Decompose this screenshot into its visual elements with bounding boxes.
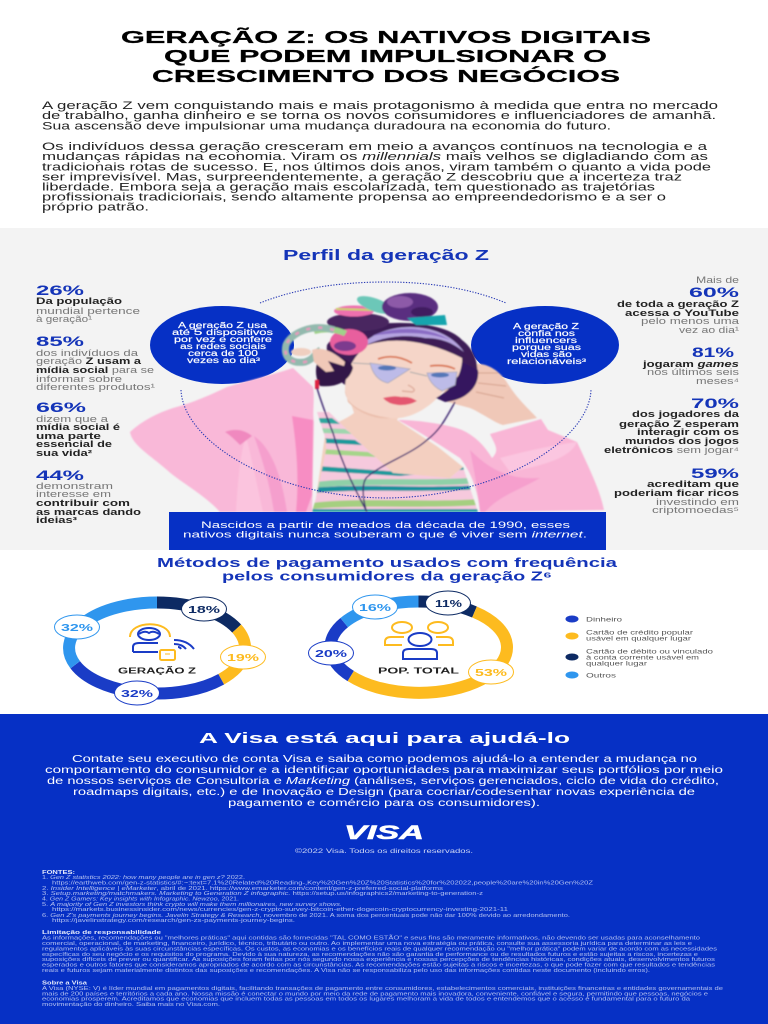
left statistics: 85% — [36, 333, 85, 349]
callout bubble: dispositivos: cerca de 100 — [188, 349, 259, 358]
donut chart: população total — [308, 591, 514, 693]
right statistics: 59% — [691, 465, 740, 481]
label 20%: 20% — [315, 649, 347, 660]
left statistics: mídia social para se — [36, 365, 154, 375]
chart label: POP. TOTAL — [378, 666, 459, 676]
banner: nascidos: Nascidos a partir de meados da década de 1990, esses — [201, 520, 570, 531]
legend: à conta corrente usável em — [586, 654, 699, 662]
intro paragraph 1: A geração Z vem conquistando mais e mais protagonismo à medida que entra no mercado — [42, 100, 718, 112]
left jacket sleeve and body — [130, 368, 314, 512]
right statistics: dos jogadores da — [632, 409, 740, 419]
callout bubble: dispositivos: A geração Z usa — [178, 321, 268, 330]
about visa: economias prosperem. Acreditamos que economias que incluem todas as pessoas em todos os lugares melhoram a vida de todos e entendemos que o acesso é fundamental para o futuro da — [42, 996, 690, 1002]
disclaimer: regulamentos aplicáveis às suas circunstâncias específicas. Os custos, as economias e os benefícios reais de qualquer recomendação ou "melhor prática" podem variar de acordo com as necessidades — [42, 946, 718, 952]
lilac hair — [358, 327, 464, 352]
left statistics: 66% — [36, 399, 87, 415]
sources: 4. Gen Z Gamers: Key insights with Infographic. Newzoo, 2021. — [42, 896, 239, 902]
pink bun — [330, 329, 368, 355]
label 32% light blue: 32% — [61, 623, 93, 634]
right jacket sleeve and body — [398, 419, 604, 512]
right statistics: jogaram games — [642, 359, 739, 369]
title: QUE PODEM IMPULSIONAR O — [164, 46, 607, 66]
disclaimer: esperados e outros fatores que consideramos apropriados de acordo com as circunstâncias. As recomendações estão sujeitas a riscos e incertezas, o que pode fazer com que resultados e tendências — [42, 962, 716, 968]
label 19% — [220, 645, 266, 669]
callout bubble: dispositivos: até 5 dispositivos — [172, 327, 273, 338]
visa paragraph: Contate seu executivo de conta Visa e saiba como podemos ajudá-lo a entender a mudança no — [72, 754, 698, 765]
label 18% — [182, 597, 226, 621]
callout bubble: influencers — [471, 306, 619, 384]
left statistics: sua vida² — [36, 448, 92, 458]
disclaimer: comercial, operacional, de marketing, financeiro, jurídico, técnico, tributário ou outro. Ao implementar uma nova estratégia ou prática, consulte sua assessoria jurídica para determinar as leis e — [42, 941, 692, 947]
heading: métodos de pagamento: pelos consumidores da geração Z⁶ — [222, 568, 552, 584]
right statistics — [604, 275, 740, 515]
right statistics: 81% — [692, 344, 735, 360]
left statistics: interesse em — [36, 489, 111, 499]
right statistics: Mais de — [696, 275, 739, 285]
visa paragraph: de nossos serviços de Consultoria e Marketing (análises, serviços gerenciados, ciclo de vida do crédito, — [47, 776, 719, 787]
banner: nascidos: nativos digitais nunca souberam o que é viver sem internet . — [183, 530, 587, 540]
left statistics: à geração¹ — [36, 314, 92, 324]
legend: Cartão de crédito popular — [586, 630, 694, 636]
label 20% — [308, 641, 354, 665]
right statistics: investindo em — [656, 497, 739, 507]
right ear cup — [436, 362, 478, 402]
lips — [383, 396, 417, 405]
disclaimer: suposições difíceis de prever ou quantificar. As suposições foram feitas por nós segundo nossa experiência e nossas percepções de tendências históricas, condições atuais, desenvolvimentos futuros — [42, 957, 716, 963]
intro paragraph 2: liberdade. Embora seja a geração mais escolarizada, tem questionado as trajetórias — [42, 182, 655, 194]
intro paragraph 2: próprio patrão. — [42, 202, 149, 214]
label 53% — [468, 660, 514, 684]
left statistics: as marcas dando — [36, 507, 142, 517]
visa paragraph: comportamento do consumidor e a identificar oportunidades para maximizar seus portfólios por meio — [45, 765, 724, 776]
callout bubble: influencers: vidas são — [521, 350, 573, 359]
left hand — [312, 349, 345, 372]
donut chart: geração Z — [54, 597, 266, 705]
callout bubble: influencers: A geração Z — [513, 322, 579, 331]
legend: Outros — [586, 672, 616, 680]
sources: 6. Gen Z's payments journey begins. Javelin Strategy & Research, novembro de 2021. A soma dos percentuais pode não dar 100% devido ao arredondamento. — [42, 913, 570, 919]
intro paragraph 2: tradicionais rotas de sucesso. E, nos últimos dois anos, viram também o quanto a vida pode — [42, 162, 711, 174]
callout bubble: dispositivos: por vez e confere — [174, 335, 272, 344]
icon: group of people — [385, 622, 453, 659]
label 32% light blue — [54, 615, 100, 639]
sources: FONTES: — [42, 870, 75, 876]
disclaimer: específicas do seu negócio e os requisitos do programa. Devido à sua natureza, as recomendações não são garantia de performance ou de resultados futuros e estão sujeitas a riscos, incertezas e — [42, 952, 698, 958]
right statistics: vez ao dia¹ — [679, 325, 739, 335]
intro paragraph 1 — [42, 100, 718, 132]
right statistics: geração Z esperam — [619, 419, 739, 429]
left statistics: geração Z usam a — [36, 356, 142, 366]
heading: métodos de pagamento: Métodos de pagamento usados com frequência — [157, 555, 618, 570]
right statistics: pelo menos uma — [641, 316, 739, 326]
right statistics: de toda a geração Z — [617, 299, 740, 309]
sources: 5. A majority of Gen Z investors think crypto will make them millionaires, new survey shows. — [42, 902, 342, 908]
intro paragraph 2 — [42, 141, 711, 214]
right statistics: criptomoedas⁵ — [652, 505, 739, 515]
right statistics: meses⁴ — [696, 376, 739, 386]
neck and chest — [316, 388, 463, 500]
left statistics: dizem que a — [36, 414, 108, 424]
sources: 2. Insider Intelligence | eMarketer , abril de 2021. https://www.emarketer.com/content/gen-z-preferred-social-platforms — [42, 886, 444, 892]
callout bubble: dispositivos — [150, 306, 294, 384]
visa heading: A Visa está aqui para ajudá-lo — [199, 731, 570, 747]
legend: usável em qualquer lugar — [586, 636, 692, 642]
right statistics: nos últimos seis — [647, 367, 740, 377]
title: CRESCIMENTO DOS NEGÓCIOS — [152, 65, 620, 86]
sources: 1. Gen Z statistics 2022: how many people are in gen z? 2022. — [42, 875, 245, 881]
visa paragraph — [45, 754, 724, 809]
label 32% blue: 32% — [121, 689, 153, 700]
sources: 3. Setup.marketing/matchmakers. Marketing to Generation Z infographic. https://setup.us/infographics2/marketing-to-generation-z — [42, 891, 484, 897]
intro paragraph 1: Sua ascensão deve impulsionar uma mudança duradoura na economia do futuro. — [42, 120, 611, 132]
intro paragraph 2: ser imprevisível. Mas, surpreendentemente, a geração Z descobriu que a incerteza traz — [42, 172, 682, 184]
visa paragraph: pagamento e comércio para os consumidores). — [228, 798, 540, 809]
right statistics: 60% — [689, 284, 740, 300]
right statistics: 70% — [691, 395, 740, 411]
label 53%: 53% — [475, 668, 507, 679]
face — [345, 341, 462, 418]
eyebrows — [378, 357, 455, 369]
legend — [566, 616, 714, 680]
left statistics: essencial de — [36, 439, 112, 449]
hair buns and braids — [327, 313, 389, 331]
left statistics: Da população — [36, 296, 123, 306]
copyright: ©2022 Visa. Todos os direitos reservados. — [295, 848, 473, 855]
nose — [402, 385, 414, 392]
right statistics: mundos dos jogos — [625, 436, 739, 446]
callout bubble: influencers: relacionáveis³ — [507, 357, 587, 366]
glasses — [370, 363, 410, 383]
disclaimer: Limitação de responsabilidade — [42, 930, 161, 936]
label 16% — [352, 595, 398, 619]
left statistics: contribuir com — [36, 498, 130, 508]
label 19%: 19% — [227, 653, 259, 664]
sources — [42, 870, 593, 924]
left statistics: 26% — [36, 282, 85, 298]
label 11% — [426, 591, 470, 615]
label 16%: 16% — [359, 603, 391, 614]
panel: perfil da geração Z — [0, 228, 768, 550]
braided headband loop — [285, 328, 334, 362]
chart label: GERAÇÃO Z — [118, 666, 196, 676]
disclaimer: reais e futuros sejam materialmente distintos das suposições e recomendações. A Visa não se responsabiliza pelo uso das informações contidas neste documento (incluindo erros). — [42, 968, 650, 974]
banner: nascidos — [169, 512, 606, 550]
intro paragraph 2: Os indivíduos dessa geração cresceram em meio a avanços contínuos na tecnologia e a — [42, 141, 707, 153]
about visa: mais de 200 países e territórios a cada ano. Nossa missão é conectar o mundo por meio da rede de pagamento mais inovadora, conveniente, confiável e segura, permitindo que pessoas, negócios e — [42, 992, 708, 998]
left statistics: mídia social é — [36, 422, 120, 432]
icon: person with phone and wifi — [130, 624, 194, 660]
left statistics: mundial pertence — [36, 306, 140, 316]
intro paragraph 2: mudanças rápidas na economia. Viram os millennials mais velhos se digladiando com as — [42, 151, 708, 163]
left statistics: diferentes produtos¹ — [36, 382, 155, 392]
label 11%: 11% — [435, 599, 462, 610]
photo: young woman with headphones and pink jacket — [130, 292, 604, 514]
about visa: Sobre a Visa — [42, 980, 87, 986]
heading: métodos de pagamento — [157, 555, 618, 584]
legend: Cartão de débito ou vinculado — [586, 648, 714, 656]
right statistics: eletrônicos sem jogar⁴ — [604, 445, 739, 455]
right statistics: interagir com os — [637, 427, 739, 437]
about visa: A Visa (NYSE: V) é líder mundial em pagamentos digitais, facilitando transações de pagamento entre consumidores, estabelecimentos comerciais, instituições financeiras e entidades governamentais de — [42, 986, 723, 992]
title: GERAÇÃO Z: OS NATIVOS DIGITAIS — [121, 26, 651, 47]
left statistics: dos indivíduos da — [36, 348, 138, 358]
right statistics: poderiam ficar ricos — [614, 488, 739, 498]
sources: https://earthweb.com/gen-z-statistics/#:~:text=7.1%20Related%20Reading-,Key%20Gen%20Z%20Statistics%20for%202022,people%20are%20in%20Gen%20Z — [52, 880, 593, 886]
dark hair behind head — [327, 323, 477, 390]
visa logo: VISA — [344, 822, 424, 844]
right statistics: acreditam que — [647, 479, 739, 489]
intro paragraph 1: de trabalho, ganha dinheiro e se torna os novos consumidores e influenciadores de amanhã. — [42, 110, 716, 122]
sources: https://javelinstrategy.com/research/gen-zs-payments-journey-begins. — [52, 918, 295, 924]
title — [121, 26, 651, 86]
panel: visa — [0, 714, 768, 1024]
left statistics: 44% — [36, 467, 85, 483]
callout bubble: dispositivos: as redes sociais — [180, 342, 266, 351]
callout bubble: dispositivos: vezes ao dia³ — [187, 356, 261, 365]
callout bubble: influencers: influencers — [515, 336, 577, 345]
about visa — [42, 980, 723, 1008]
disclaimer — [42, 930, 718, 974]
panel heading: Perfil da geração Z — [283, 248, 489, 264]
left statistics — [36, 282, 155, 525]
left statistics: uma parte — [36, 431, 101, 441]
legend: qualquer lugar — [586, 660, 648, 668]
dotted circle around photo — [181, 282, 591, 498]
striped top — [310, 408, 482, 514]
disclaimer: As informações, recomendações ou "melhores práticas" aqui contidas são fornecidas "TAL COMO ESTÃO" e seus fins são meramente informativos, não devendo ser usadas para aconselhamento — [42, 934, 700, 942]
right statistics: acessa o YouTube — [625, 308, 739, 318]
about visa: movimentação do dinheiro. Saiba mais no Visa.com. — [42, 1002, 220, 1008]
left ear cup — [316, 357, 353, 386]
right hand — [440, 364, 537, 425]
left statistics: informar sobre — [36, 374, 122, 384]
legend: Dinheiro — [586, 616, 623, 624]
sources: https://markets.businessinsider.com/news/currencies/gen-z-crypto-survey-bitcoin-ether-dogecoin-cryptocurrency-investing-2021-11 — [52, 907, 508, 913]
intro paragraph 2: profissionais tradicionais, sendo altamente propensa ao empreendedorismo e a ser o — [42, 192, 666, 204]
left statistics: demonstram — [36, 481, 113, 491]
label 18%: 18% — [188, 605, 220, 616]
callout bubble: influencers: confia nos — [518, 329, 575, 338]
left statistics: ideias³ — [36, 515, 77, 525]
callout bubble: influencers: porque suas — [512, 343, 581, 352]
label 32% blue — [114, 681, 160, 705]
earphone cable — [317, 388, 367, 512]
visa paragraph: roadmaps digitais, etc.) e de Inovação e Design (para cocriar/codesenhar novas experiência de — [73, 787, 696, 798]
